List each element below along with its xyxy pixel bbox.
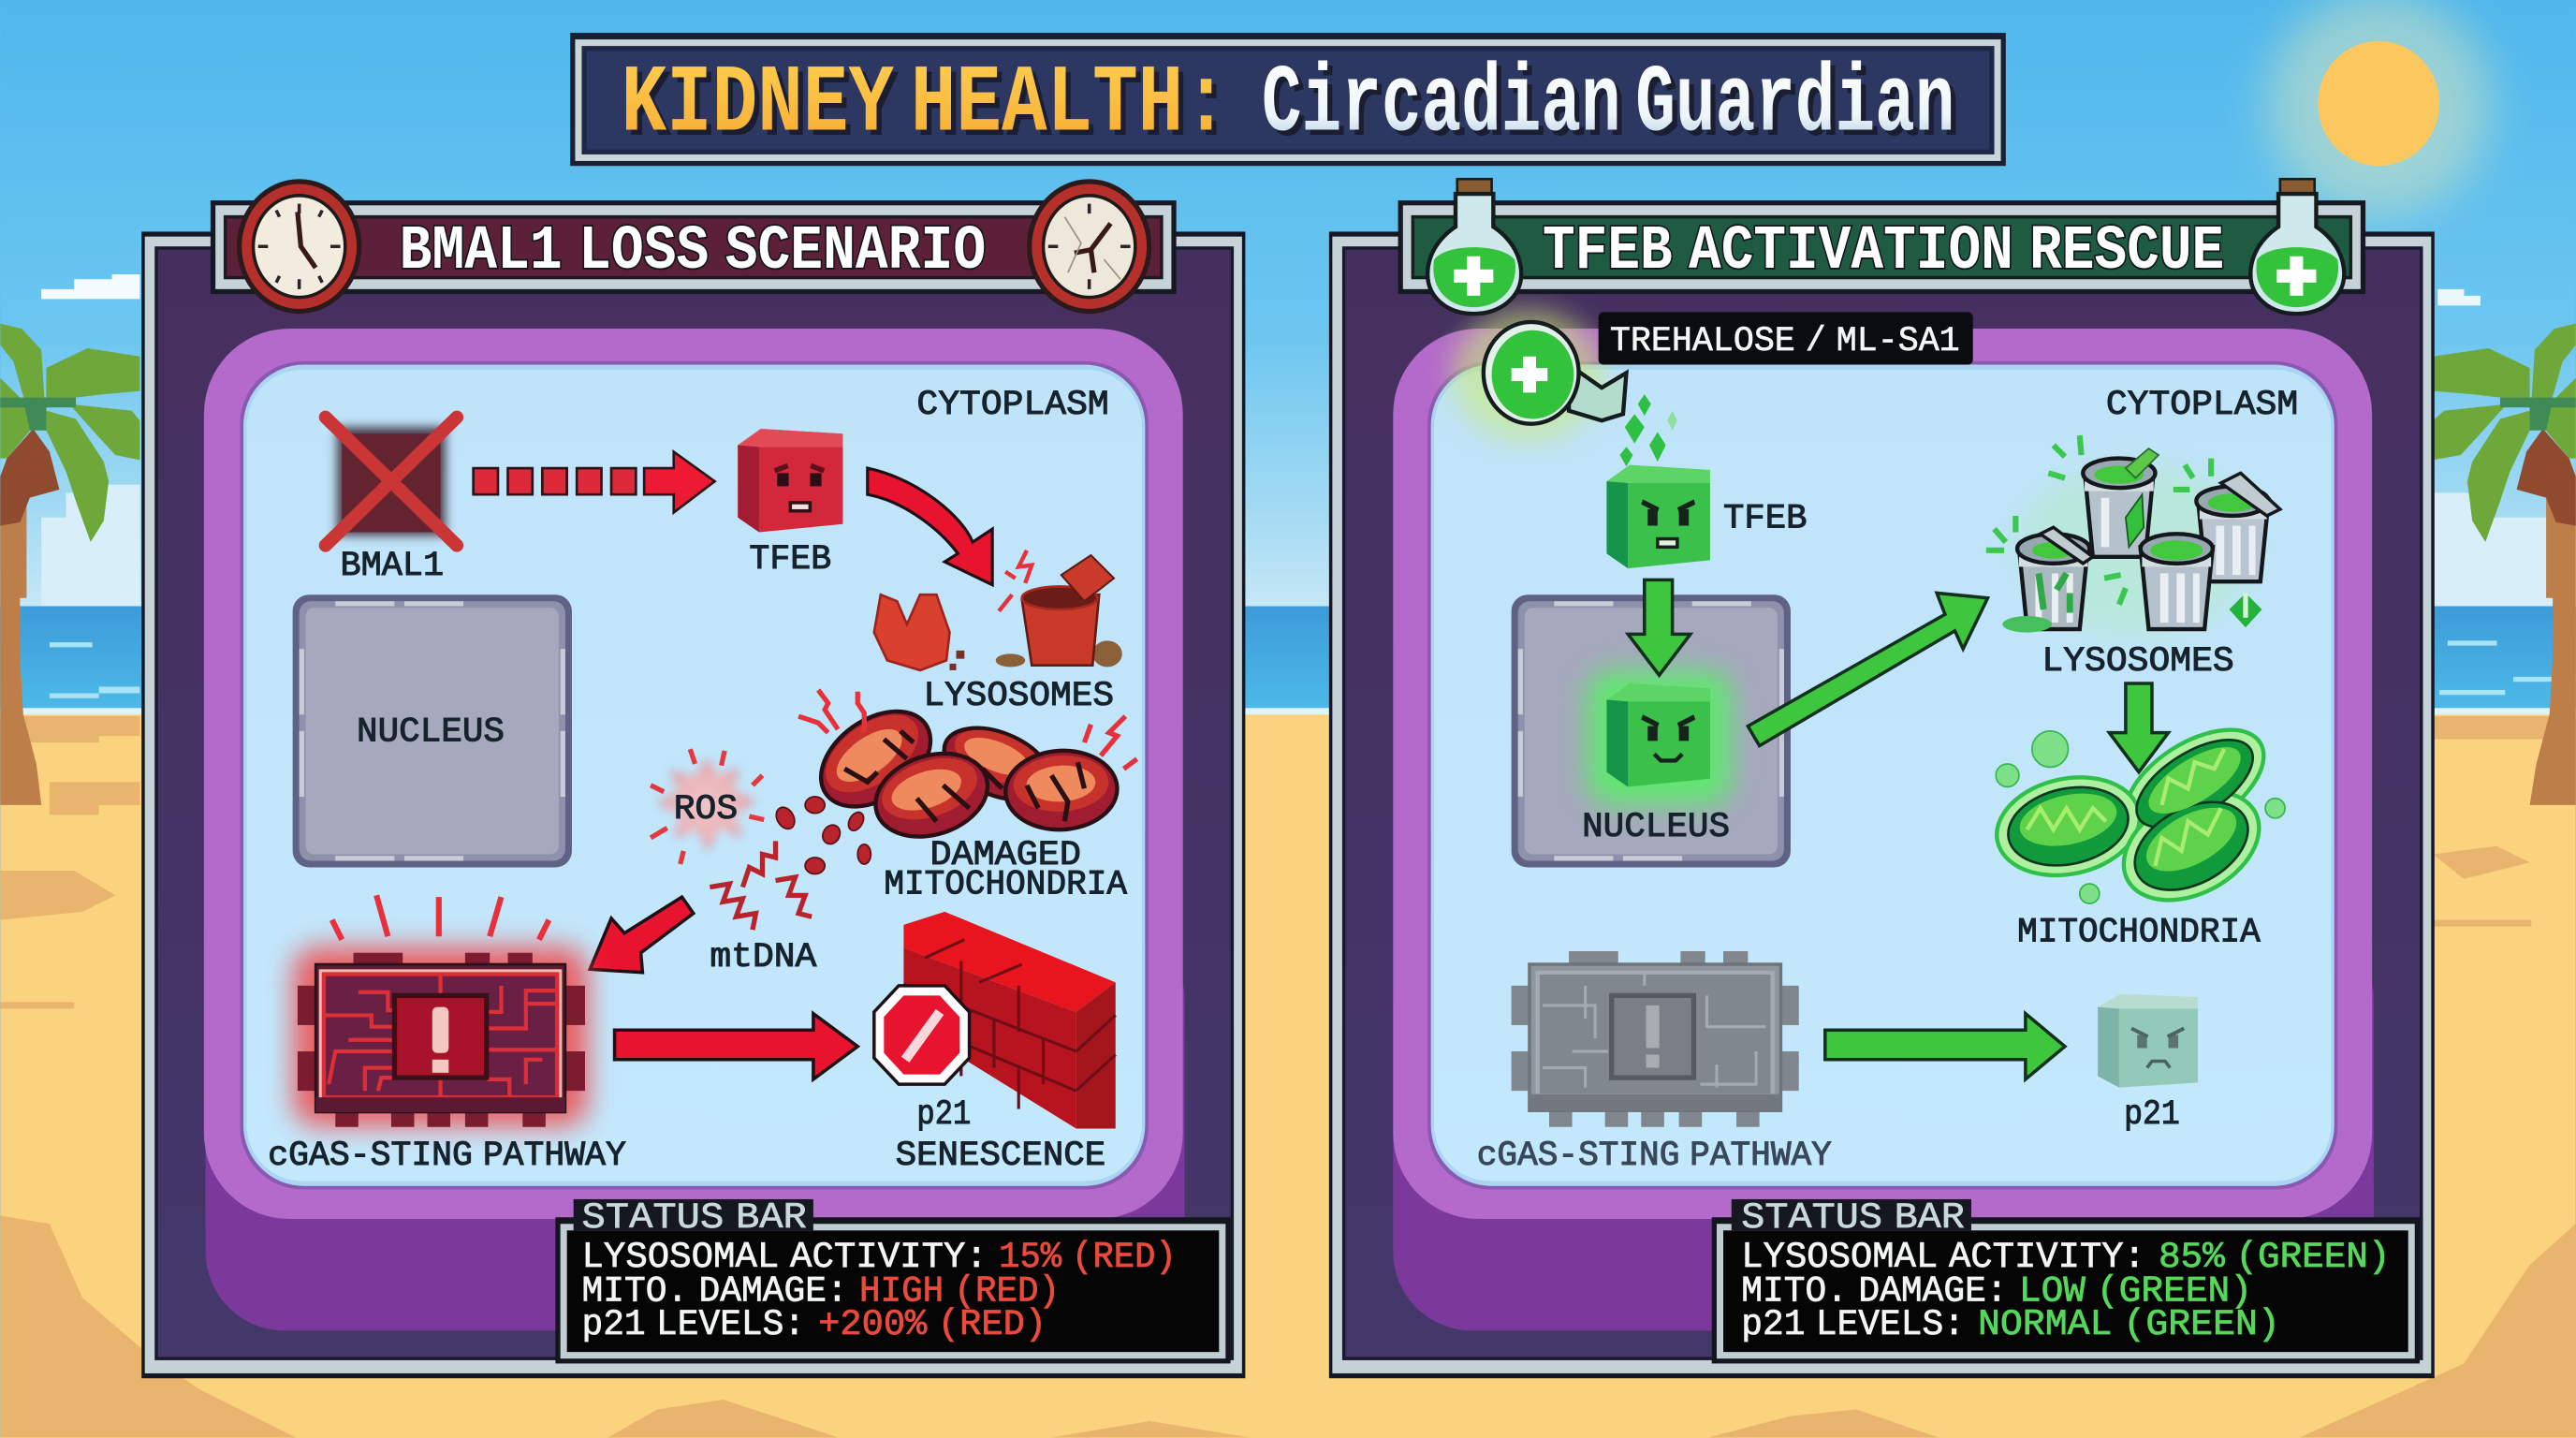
title banner bbox=[570, 33, 2006, 166]
status line: lysosomal activity: 85% (GREEN) bbox=[2159, 1237, 2390, 1278]
label: p21: p21 bbox=[2124, 1095, 2180, 1135]
label: damaged mitochondria bbox=[884, 836, 1128, 905]
mitochondrion back bbox=[934, 714, 1061, 814]
green sparks bbox=[1986, 435, 2211, 605]
arrow: mtDNA to cGAS-STING bbox=[590, 897, 694, 973]
status line: lysosomal activity bbox=[581, 1237, 1177, 1278]
label: cGAS-STING pathway: cGAS-STING PATHWAY bbox=[268, 1137, 626, 1176]
icon: stop sign bbox=[874, 986, 970, 1084]
icon: active cGAS-STING chip bbox=[293, 946, 588, 1127]
title: Circadian Guardian: Circadian Guardian bbox=[1262, 51, 1954, 159]
status line: mito damage: MITO. DAMAGE: bbox=[1741, 1271, 2008, 1313]
arrow: TFEB into nucleus bbox=[1628, 580, 1690, 675]
icon: potion bbox=[1427, 179, 1521, 314]
icon: green TFEB cube bbox=[1606, 465, 1710, 568]
title: KIDNEY HEALTH: KIDNEY HEALTH: bbox=[622, 51, 1229, 159]
can: back left bbox=[2083, 448, 2159, 557]
label: cytoplasm: CYTOPLASM bbox=[916, 386, 1109, 425]
arrow: cGAS-STING to senescence bbox=[615, 1014, 857, 1079]
icon: pale p21 cube bbox=[2098, 994, 2198, 1088]
label: TFEB: TFEB bbox=[1723, 499, 1807, 538]
status line: p21 levels: NORMAL (GREEN) bbox=[1978, 1304, 2280, 1345]
illustration: right palm tree bbox=[2433, 324, 2576, 805]
label: nucleus: NUCLEUS bbox=[357, 712, 505, 752]
panel: BMAL1 loss scenario bbox=[141, 179, 1245, 1378]
icon: broken lysosomes bbox=[874, 550, 1122, 670]
icon: damaged mitochondria bbox=[803, 692, 1120, 850]
status line: mito damage bbox=[1741, 1271, 2252, 1313]
icon: healthy lysosome cans bbox=[1986, 435, 2280, 636]
label: nucleus: NUCLEUS bbox=[1582, 808, 1730, 847]
brick lines bbox=[903, 940, 1116, 1108]
mitochondrion center bbox=[865, 740, 999, 850]
status bar: left bbox=[555, 1197, 1231, 1363]
icon: healthy mitochondria bbox=[1987, 708, 2285, 922]
mitochondria cracks bbox=[844, 731, 1084, 821]
cell body bbox=[204, 329, 1184, 1330]
status bar: right bbox=[1712, 1197, 2420, 1363]
icon: BMAL1 crossed out block bbox=[326, 418, 457, 546]
icon: nuclear glowing TFEB cube bbox=[1587, 670, 1732, 805]
arrow: dashed BMAL1 to TFEB bbox=[474, 452, 715, 512]
icon: sun bbox=[2267, 0, 2490, 215]
label: mitochondria: MITOCHONDRIA bbox=[2017, 913, 2261, 952]
arrow: cGAS-STING to p21 bbox=[1825, 1014, 2065, 1079]
label: lysosomes: LYSOSOMES bbox=[923, 677, 1114, 716]
status line: p21 levels bbox=[581, 1304, 1046, 1345]
can: back right bbox=[2196, 473, 2280, 581]
icon: green sparkles bbox=[1619, 394, 1677, 466]
status heading: STATUS BAR bbox=[581, 1197, 807, 1239]
label: damaged mitochondria: MITOCHONDRIA bbox=[884, 866, 1128, 905]
icon: clock bbox=[237, 179, 361, 314]
icon: cracked clock bbox=[1027, 179, 1151, 314]
status line: p21 levels: p21 LEVELS: bbox=[1741, 1304, 1965, 1345]
icon: alert ticks above chip bbox=[332, 895, 549, 940]
status line: p21 levels: p21 LEVELS: bbox=[581, 1304, 805, 1345]
header banner: BMAL1 loss scenario bbox=[211, 179, 1177, 314]
chip circuit traces bbox=[1543, 973, 1766, 1088]
chip circuit traces bbox=[326, 976, 555, 1095]
debris bbox=[950, 651, 964, 670]
label: TFEB: TFEB bbox=[749, 540, 831, 580]
mitochondrion right bbox=[1003, 748, 1120, 832]
bubbles bbox=[1996, 731, 2285, 903]
arrow: lysosomes to mitochondria bbox=[2109, 683, 2169, 772]
label: ROS: ROS bbox=[674, 790, 738, 829]
icon: senescence brick wall bbox=[903, 912, 1116, 1128]
can: front left bbox=[2017, 527, 2093, 629]
label: BMAL1: BMAL1 bbox=[341, 547, 444, 586]
cell body bbox=[1393, 329, 2374, 1330]
title: Circadian Guardian bbox=[1262, 51, 1960, 164]
status line: mito damage: MITO. DAMAGE: bbox=[581, 1271, 848, 1313]
panel frame bbox=[1329, 231, 2435, 1378]
label: mtDNA: mtDNA bbox=[710, 938, 817, 977]
status line: mito damage: HIGH (RED) bbox=[859, 1271, 1060, 1313]
label: damaged mitochondria: DAMAGED bbox=[929, 836, 1081, 875]
icon: red sparks around mitochondria bbox=[798, 690, 1137, 769]
green diamond drop bbox=[2229, 593, 2262, 627]
icon: red TFEB cube bbox=[738, 429, 842, 533]
icon: mtDNA strands bbox=[710, 841, 812, 930]
arrow: nucleus to lysosomes bbox=[1748, 593, 1988, 746]
broken lid bbox=[1061, 555, 1114, 601]
header banner: TFEB activation rescue bbox=[1398, 179, 2365, 314]
status line: p21 levels: +200% (RED) bbox=[818, 1304, 1046, 1345]
status line: mito damage bbox=[581, 1271, 1060, 1313]
label: p21: p21 bbox=[916, 1095, 971, 1135]
heading text: TFEB ACTIVATION RESCUE bbox=[1543, 216, 2224, 287]
red sparks bbox=[999, 550, 1032, 611]
panel: nucleus bbox=[293, 594, 572, 867]
mitochondrion upper left bbox=[803, 692, 948, 826]
icon: inactive cGAS-STING chip bbox=[1512, 951, 1799, 1127]
cristae bbox=[2027, 749, 2224, 866]
broken red blob bbox=[874, 594, 950, 670]
title: Circadian Guardian: Circadian Guardian bbox=[1266, 55, 1960, 164]
can: front right bbox=[2141, 534, 2213, 629]
label: cytoplasm: CYTOPLASM bbox=[2106, 386, 2298, 425]
icon: ROS burst bbox=[651, 749, 764, 864]
label box: trehalose / ML-SA1: TREHALOSE / ML-SA1 bbox=[1610, 322, 1960, 361]
panel: TFEB activation rescue bbox=[1329, 179, 2435, 1378]
illustration: left palm tree bbox=[0, 324, 139, 805]
label: senescence: SENESCENCE bbox=[896, 1137, 1105, 1176]
broken trash can bbox=[1022, 594, 1099, 666]
label: cGAS-STING pathway: cGAS-STING PATHWAY bbox=[1477, 1137, 1832, 1176]
status line: lysosomal activity: 15% (RED) bbox=[999, 1237, 1177, 1278]
icon: tilted treatment potion bbox=[1452, 309, 1626, 440]
slime puddle bbox=[2002, 616, 2052, 633]
status line: lysosomal activity: LYSOSOMAL ACTIVITY: bbox=[581, 1237, 988, 1278]
status line: lysosomal activity: LYSOSOMAL ACTIVITY: bbox=[1741, 1237, 2145, 1278]
arrow: curved TFEB to lysosomes bbox=[868, 468, 992, 585]
icon: debris particles bbox=[772, 797, 871, 874]
status line: mito damage: LOW (GREEN) bbox=[2019, 1271, 2252, 1313]
rubble bbox=[996, 640, 1122, 667]
status line: p21 levels bbox=[1741, 1304, 2280, 1345]
status line: lysosomal activity bbox=[1741, 1237, 2390, 1278]
status heading: STATUS BAR bbox=[1741, 1197, 1965, 1239]
panel frame bbox=[141, 231, 1245, 1378]
label: lysosomes: LYSOSOMES bbox=[2042, 642, 2234, 682]
icon: potion bbox=[2250, 179, 2344, 314]
panel: nucleus bbox=[1512, 594, 1791, 867]
title: KIDNEY HEALTH: KIDNEY HEALTH: bbox=[626, 55, 1234, 164]
heading text: BMAL1 LOSS SCENARIO bbox=[400, 216, 986, 287]
